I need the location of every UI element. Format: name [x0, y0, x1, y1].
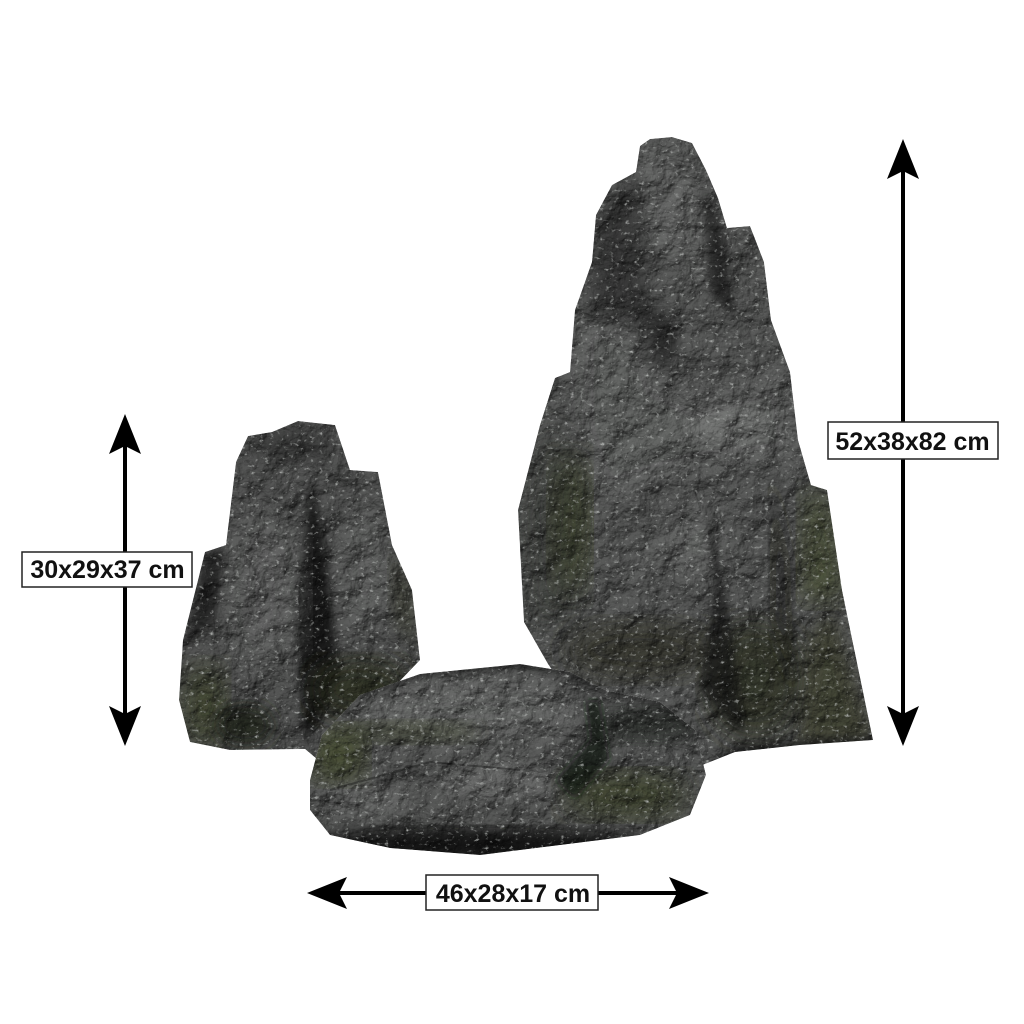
label: tall rock [828, 422, 998, 459]
dimension arrow: tall rock height [887, 139, 919, 746]
rock: flat front [310, 664, 706, 855]
dimension arrow: left rock height [109, 414, 141, 746]
label: left rock: 30x29x37 cm [30, 556, 185, 584]
dimension arrow: flat rock width [307, 877, 709, 909]
infographic: rock set dimensions [21, 137, 999, 911]
rock: tall [518, 137, 873, 764]
rock: small left [179, 421, 420, 758]
label: flat rock: 46x28x17 cm [436, 880, 590, 908]
label: tall rock: 52x38x82 cm [835, 428, 990, 456]
